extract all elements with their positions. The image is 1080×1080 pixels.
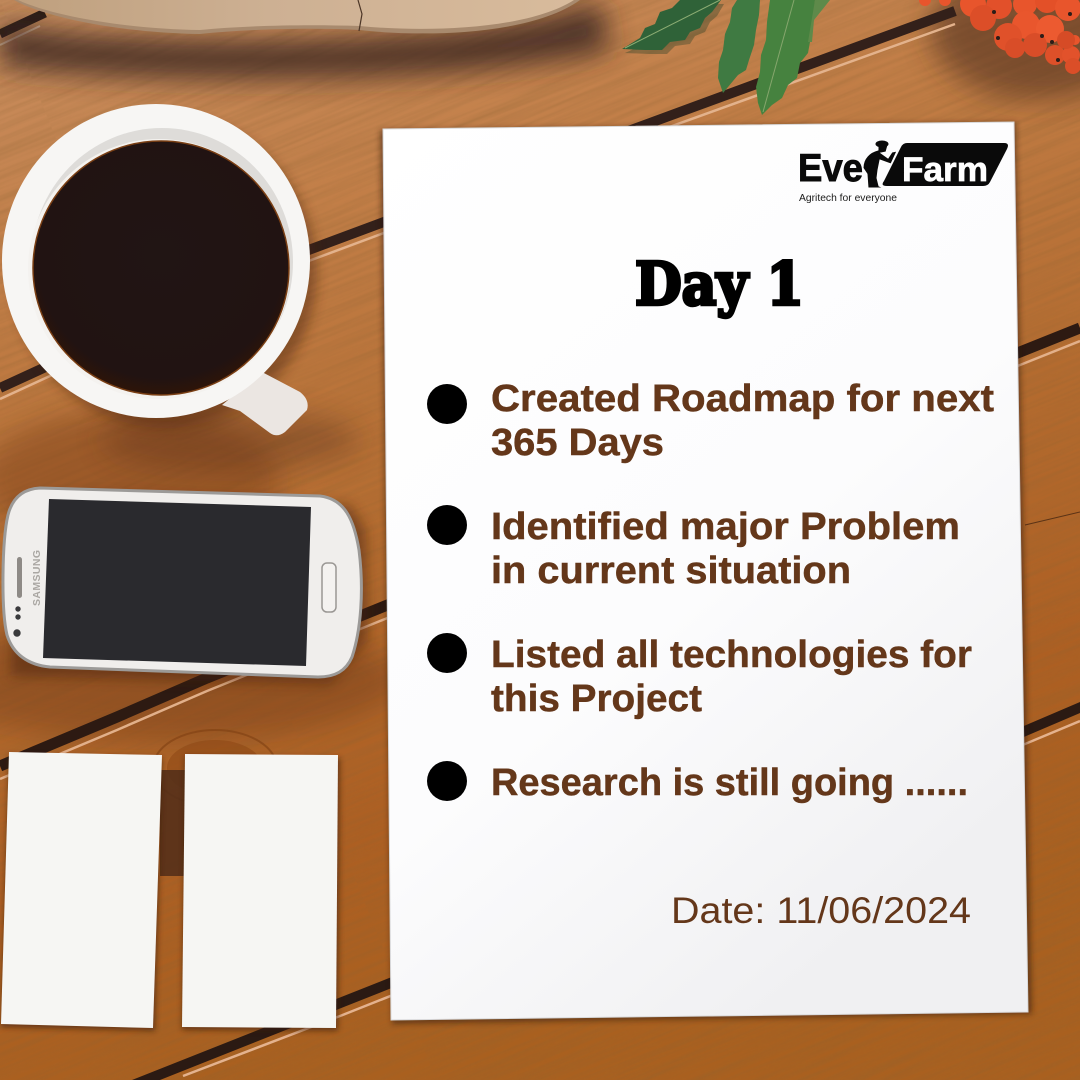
camera dots xyxy=(13,606,21,637)
cup rim xyxy=(2,104,310,418)
bullet item 1: Created Roadmap for next xyxy=(491,378,994,420)
bullet item 3: this Project xyxy=(491,678,702,720)
speaker xyxy=(17,557,22,598)
heading: Day 1: Day 1 xyxy=(635,250,804,318)
icon: green leaves xyxy=(622,0,830,115)
bullet item 3: Listed all technologies for xyxy=(491,634,972,676)
phone screen xyxy=(43,499,311,666)
logo: EveFarm xyxy=(798,140,1008,204)
date: Date: 11/06/2024 xyxy=(671,890,971,931)
bullet item 2 xyxy=(427,505,960,592)
home button xyxy=(322,563,336,612)
wooden plate at top xyxy=(0,0,610,79)
logo word Eve: Eve xyxy=(798,147,863,190)
bullet item 2: in current situation xyxy=(491,550,851,592)
bullet item 1: 365 Days xyxy=(491,422,664,464)
cup handle xyxy=(222,372,308,435)
blank card right xyxy=(182,754,340,1031)
logo banner with Farm: Farm xyxy=(902,151,988,189)
icon: red berries xyxy=(919,0,1080,74)
blank card left xyxy=(1,752,162,1031)
phone body xyxy=(3,488,361,677)
brand text: SAMSUNG xyxy=(31,550,43,606)
logo banner with Farm xyxy=(883,143,1008,189)
icon: farmer silhouette xyxy=(863,140,897,188)
bullet list xyxy=(427,378,994,804)
bullet item 4: Research is still going ...... xyxy=(491,762,968,804)
phone xyxy=(3,488,368,684)
coffee surface xyxy=(33,141,289,395)
bullet item 1 xyxy=(427,378,994,464)
panel: paper sheet xyxy=(380,122,1032,1024)
bullet item 2: Identified major Problem xyxy=(491,506,960,548)
logo tagline: Agritech for everyone xyxy=(799,192,897,204)
coffee cup xyxy=(2,104,317,435)
wood knot xyxy=(153,730,277,876)
bullet item 3 xyxy=(427,633,972,720)
